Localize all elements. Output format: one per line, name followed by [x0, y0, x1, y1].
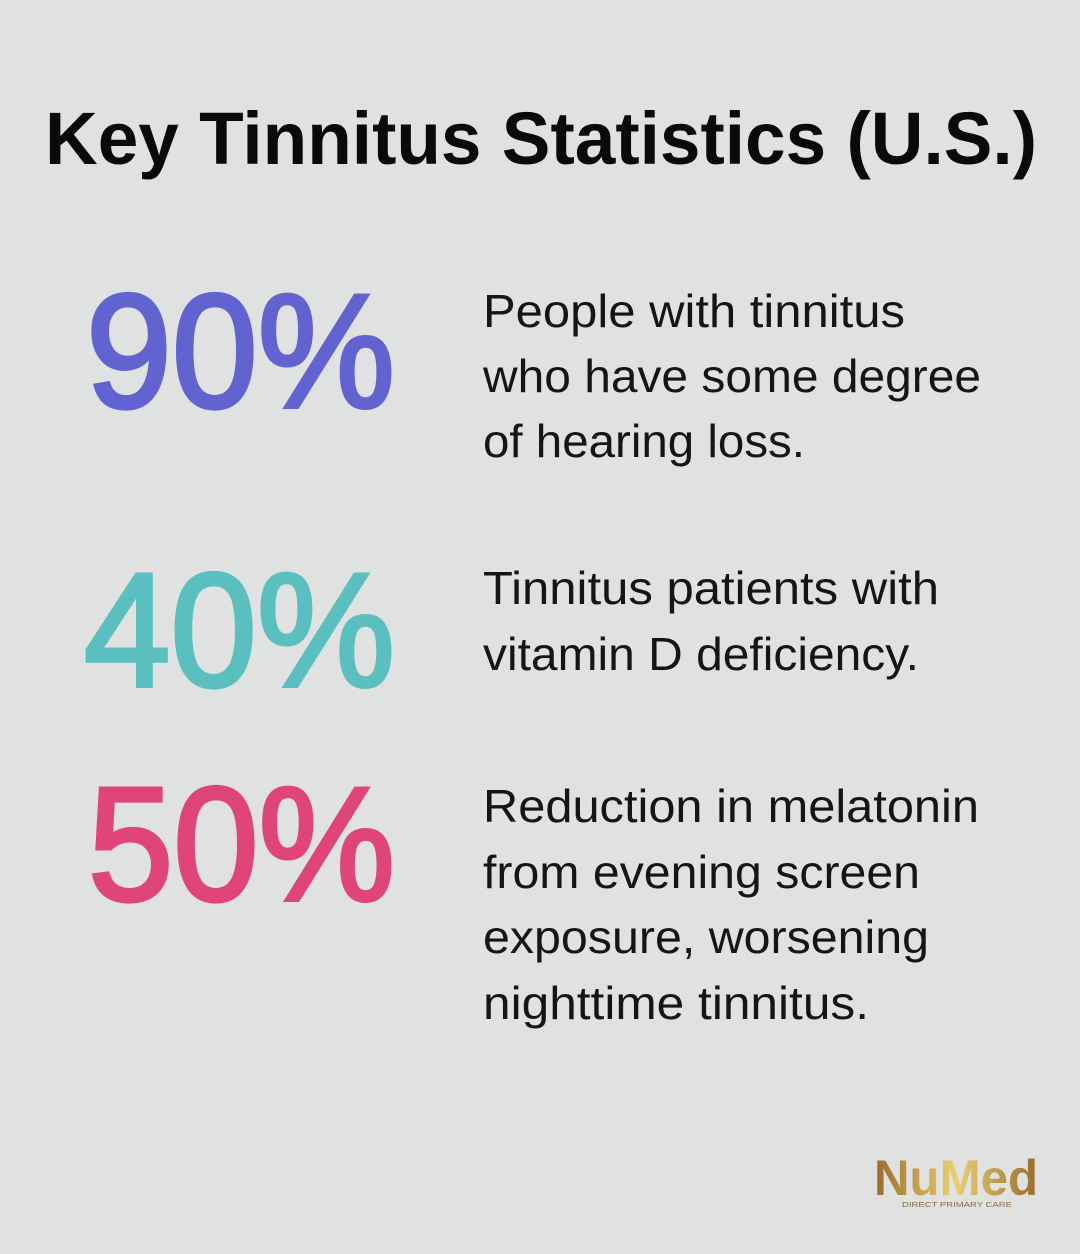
description: 50%: Reduction in melatonin — [483, 780, 979, 832]
description: 90% — [482, 285, 981, 467]
description: 40% — [483, 562, 939, 680]
number: 50%: 50% — [88, 754, 395, 935]
description: 40%: vitamin D deficiency. — [483, 628, 919, 680]
number: 40%: 40% — [84, 540, 395, 721]
stat: 90% — [86, 261, 981, 467]
description: 50%: nighttime tinnitus. — [483, 977, 869, 1029]
description: 50%: from evening screen — [483, 846, 920, 898]
description: 90%: who have some degree — [482, 350, 981, 402]
logo: NuMed: DIRECT PRIMARY CARE — [902, 1202, 1012, 1209]
stat: 50% — [88, 754, 979, 1029]
stat: 40% — [84, 540, 939, 721]
description: 90%: People with tinnitus — [483, 285, 905, 337]
logo: NuMed: NuMed — [874, 1150, 1038, 1206]
number: 90%: 90% — [86, 261, 395, 442]
description: 40%: Tinnitus patients with — [483, 562, 939, 614]
title: Key Tinnitus Statistics (U.S.) — [45, 97, 1037, 180]
description: 50% — [483, 780, 979, 1029]
description: 90%: of hearing loss. — [483, 415, 805, 467]
description: 50%: exposure, worsening — [483, 911, 929, 963]
